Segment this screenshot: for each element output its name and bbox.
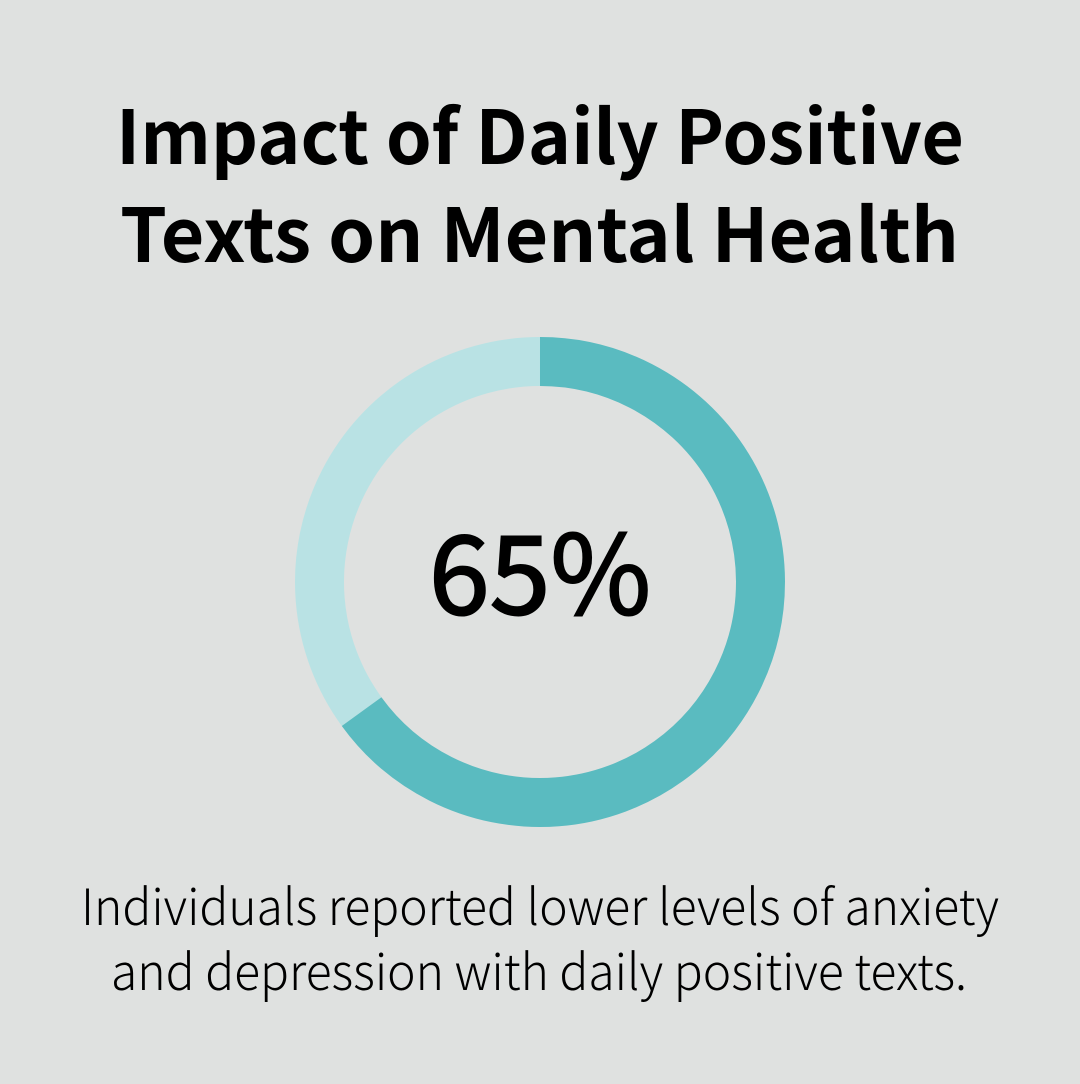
title bbox=[116, 79, 964, 284]
description text: Individuals reported lower levels of anxiety bbox=[81, 868, 999, 940]
donut chart: 65% bbox=[319, 361, 760, 803]
title: Impact of Daily Positive bbox=[116, 79, 964, 186]
title: Texts on Mental Health bbox=[120, 177, 959, 284]
donut value arc: 65% bbox=[362, 362, 760, 803]
center value: 65%: 65% bbox=[429, 489, 651, 646]
description text bbox=[81, 868, 999, 1005]
donut track: remaining 35% bbox=[319, 361, 540, 712]
description text: and depression with daily positive texts. bbox=[111, 933, 967, 1005]
